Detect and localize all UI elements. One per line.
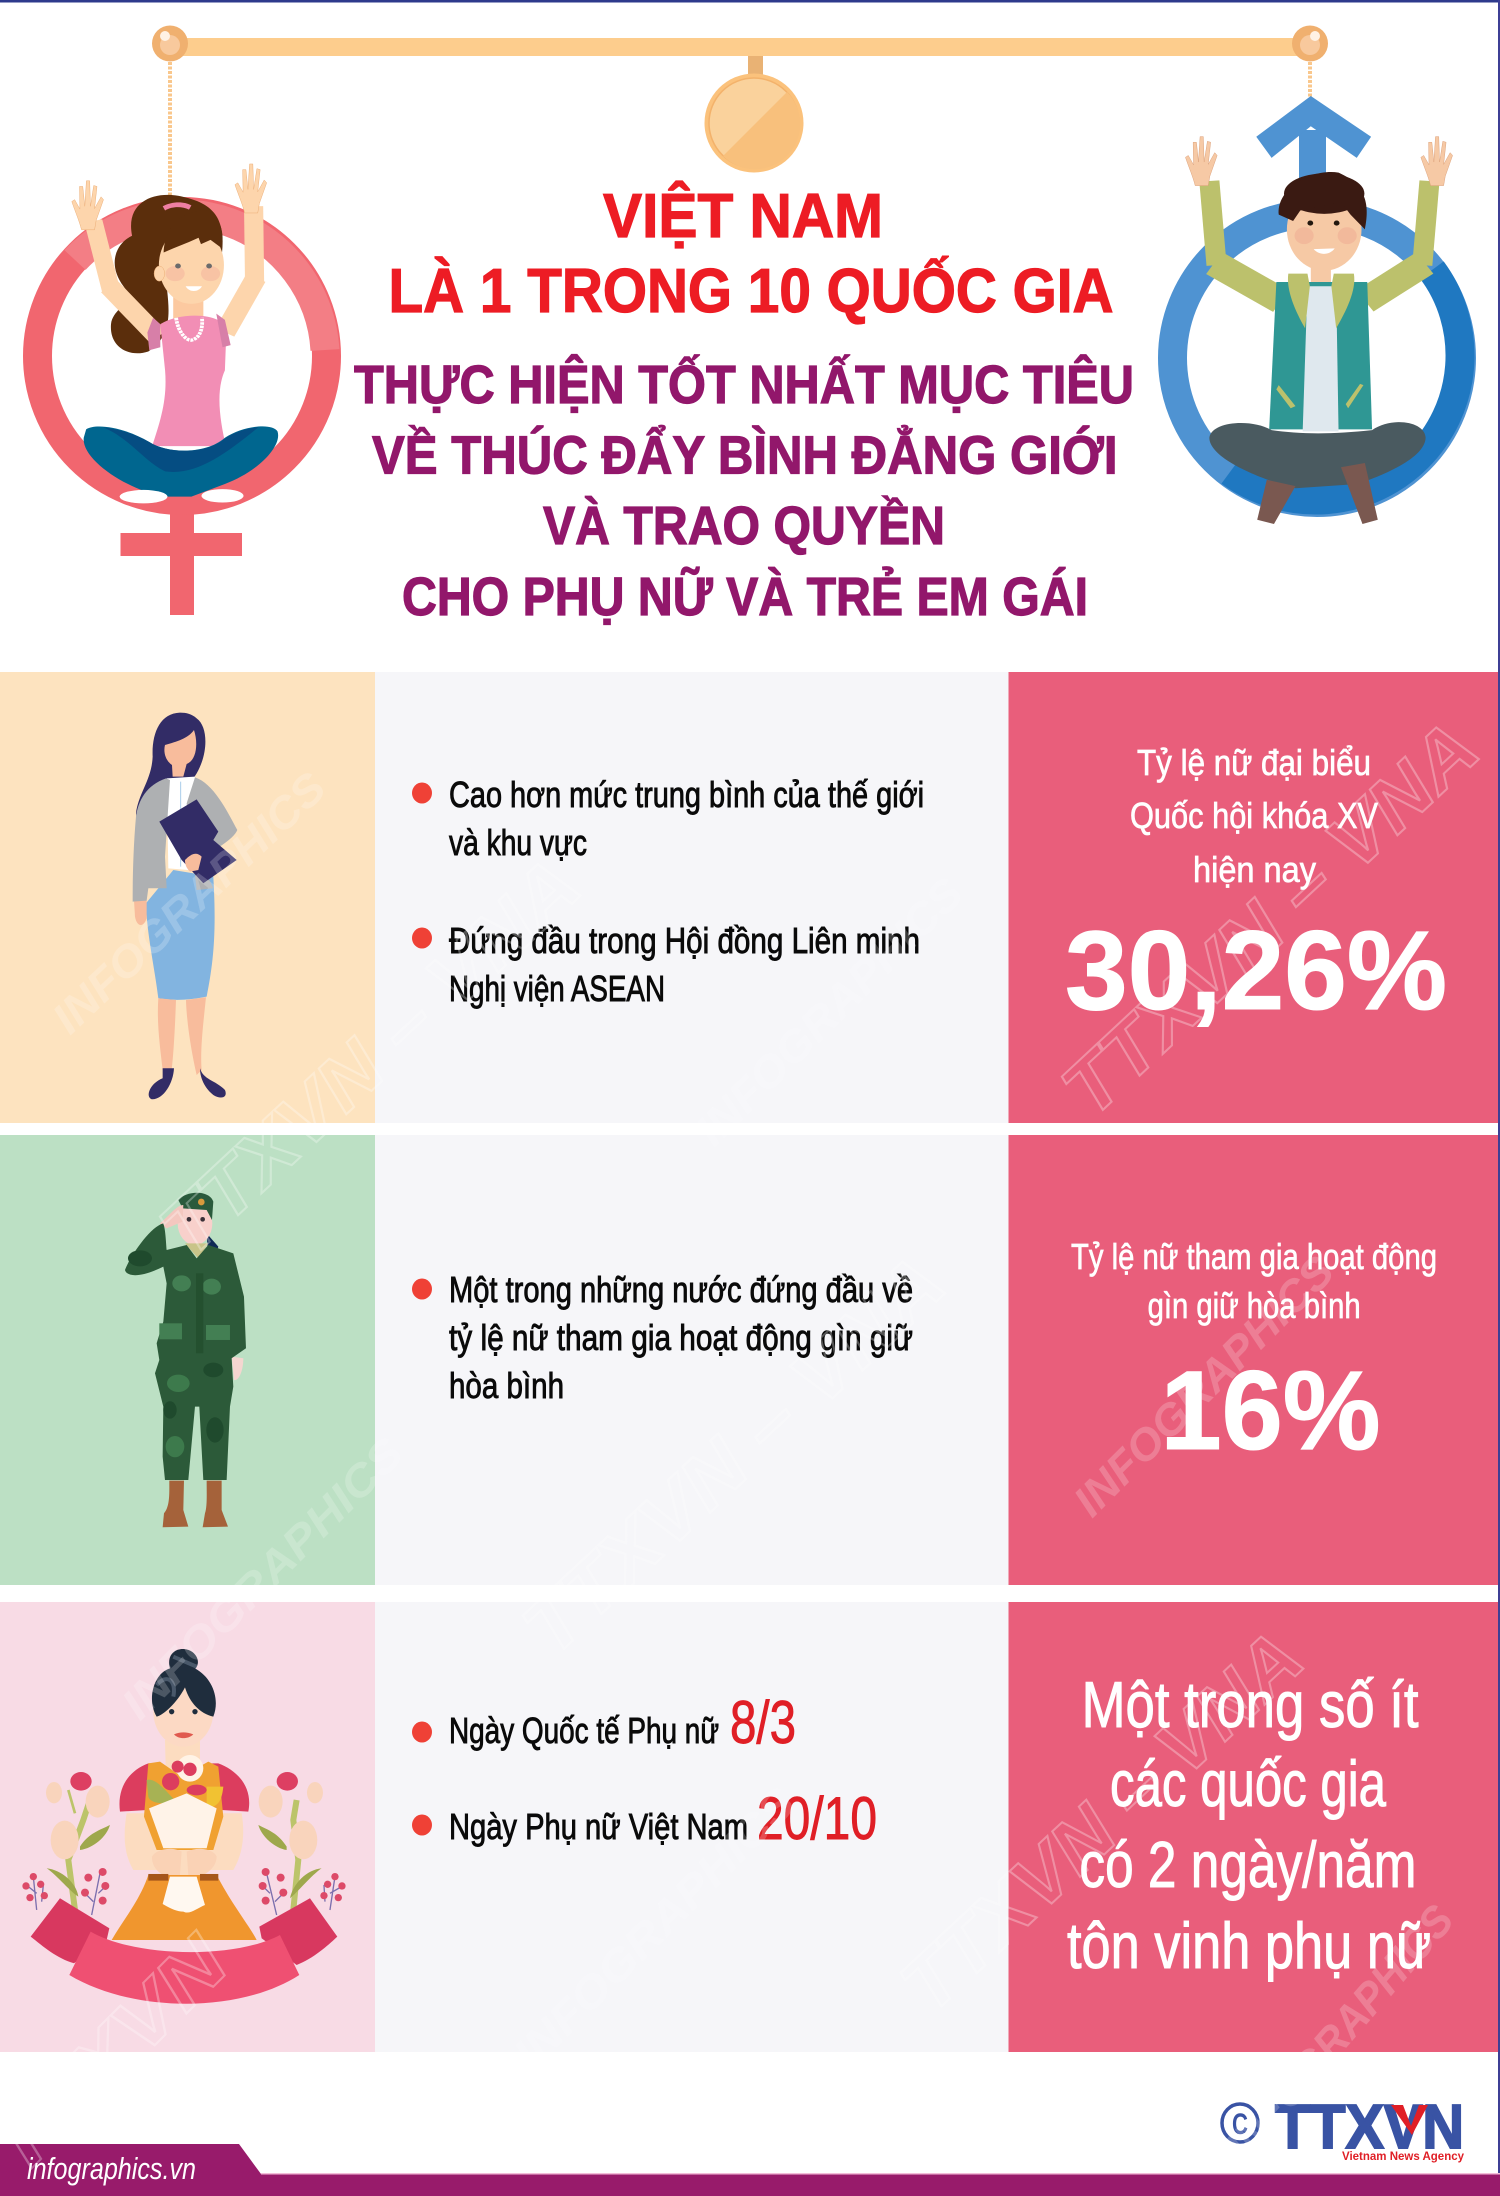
watermark pattern: INFOGRAPHICS [1064,1247,1344,1526]
footer: site name: infographics.vn [27,2151,196,2186]
panel: row 2 peacekeeping [0,1135,1498,1585]
text: row 2 bullet: Một trong những nước đứng đầu về [449,1269,913,1310]
flowers right [258,1772,346,1915]
watermark pattern: TTXVN – VNA [507,1240,961,1671]
stat: 16% [1071,1236,1437,1473]
panel: row 1 parliament [0,672,1498,1123]
bullets: row 1 [412,782,432,948]
bullets: row 3 [412,1722,432,1836]
stat: 30,26%: hiện nay [1193,849,1316,890]
subtitle [354,354,1134,627]
stat: 30,26%: 30,26% [1065,908,1447,1033]
bullet: row 2 [412,1278,432,1300]
illustration: seated man [1185,137,1453,524]
footer bar [0,2144,1500,2196]
stat: 16%: 16% [1160,1348,1380,1473]
text: women's days: Ngày Phụ nữ Việt Nam [449,1806,748,1847]
stat: 30,26% [1065,742,1447,1033]
stat: 30,26%: Tỷ lệ nữ đại biểu [1137,742,1371,783]
text: row 1 bullets [449,774,924,1009]
subtitle: CHO PHỤ NỮ VÀ TRẺ EM GÁI [402,567,1088,627]
stat: 30,26%: Quốc hội khóa XV [1130,795,1378,836]
watermark pattern: INFOGRAPHICS [504,1779,805,2079]
text: row 1 bullets: Nghị viện ASEAN [449,968,665,1009]
callout: two days per year: các quốc gia [1110,1747,1387,1820]
watermark pattern: TTXVN – VNA [144,842,597,1272]
illustration: soldier [125,1193,246,1527]
watermark pattern [0,705,1495,2192]
logo: TTXVN: Vietnam News Agency [1342,2149,1464,2163]
callout: two days per year: có 2 ngày/năm [1079,1828,1416,1901]
subtitle: THỰC HIỆN TỐT NHẤT MỤC TIÊU [354,354,1134,415]
logo: TTXVN: C [1232,2108,1248,2141]
watermark pattern: INFOGRAPHICS [112,1429,413,1729]
panel: row 3 women's days [0,1602,1498,2052]
watermark pattern: INFOGRAPHICS [43,763,336,1043]
text: row 2 bullet [449,1269,913,1406]
scale beam with weight [152,26,1328,196]
illustration: business woman [133,713,237,1099]
watermark pattern: INFOGRAPHICS [686,869,973,1155]
subtitle: VÀ TRAO QUYỀN [543,496,945,556]
title: Việt Nam là 1 trong 10: LÀ 1 TRONG 10 QUỐC GIA [388,257,1114,326]
stat: 16%: gìn giữ hòa bình [1148,1285,1361,1326]
watermark pattern: TTXVN – VNA [885,1615,1319,2028]
text: row 2 bullet: tỷ lệ nữ tham gia hoạt động gìn giữ [449,1317,913,1358]
text: women's days: 20/10 [757,1785,877,1852]
icon: male symbol [1172,96,1462,502]
title: Việt Nam là 1 trong 10 [388,182,1114,326]
illustration: woman with flowers and ribbon [22,1649,346,2004]
text: row 1 bullets: Cao hơn mức trung bình của thế giới [449,774,924,815]
callout: two days per year: Một trong số ít [1082,1668,1419,1741]
text: row 2 bullet: hòa bình [449,1365,564,1406]
subtitle: VỀ THÚC ĐẨY BÌNH ĐẲNG GIỚI [372,426,1118,486]
icon: female symbol [38,212,326,615]
illustration: seated woman [72,164,278,503]
text: row 1 bullets: Đứng đầu trong Hội đồng Liên minh [449,920,920,961]
logo: TTXVN: TTXVN [1275,2093,1464,2162]
text: row 1 bullets: và khu vực [449,822,587,863]
text: women's days: Ngày Quốc tế Phụ nữ [449,1710,719,1751]
callout: two days per year [1067,1668,1431,1982]
title: Việt Nam là 1 trong 10: VIỆT NAM [603,182,883,251]
watermark pattern: INFOGRAPHICS [1217,1896,1463,2170]
watermark pattern: TTXVN – VNA [1046,705,1495,1132]
flowers left [22,1772,110,1915]
text: women's days [449,1689,877,1852]
text: women's days: 8/3 [730,1689,796,1756]
